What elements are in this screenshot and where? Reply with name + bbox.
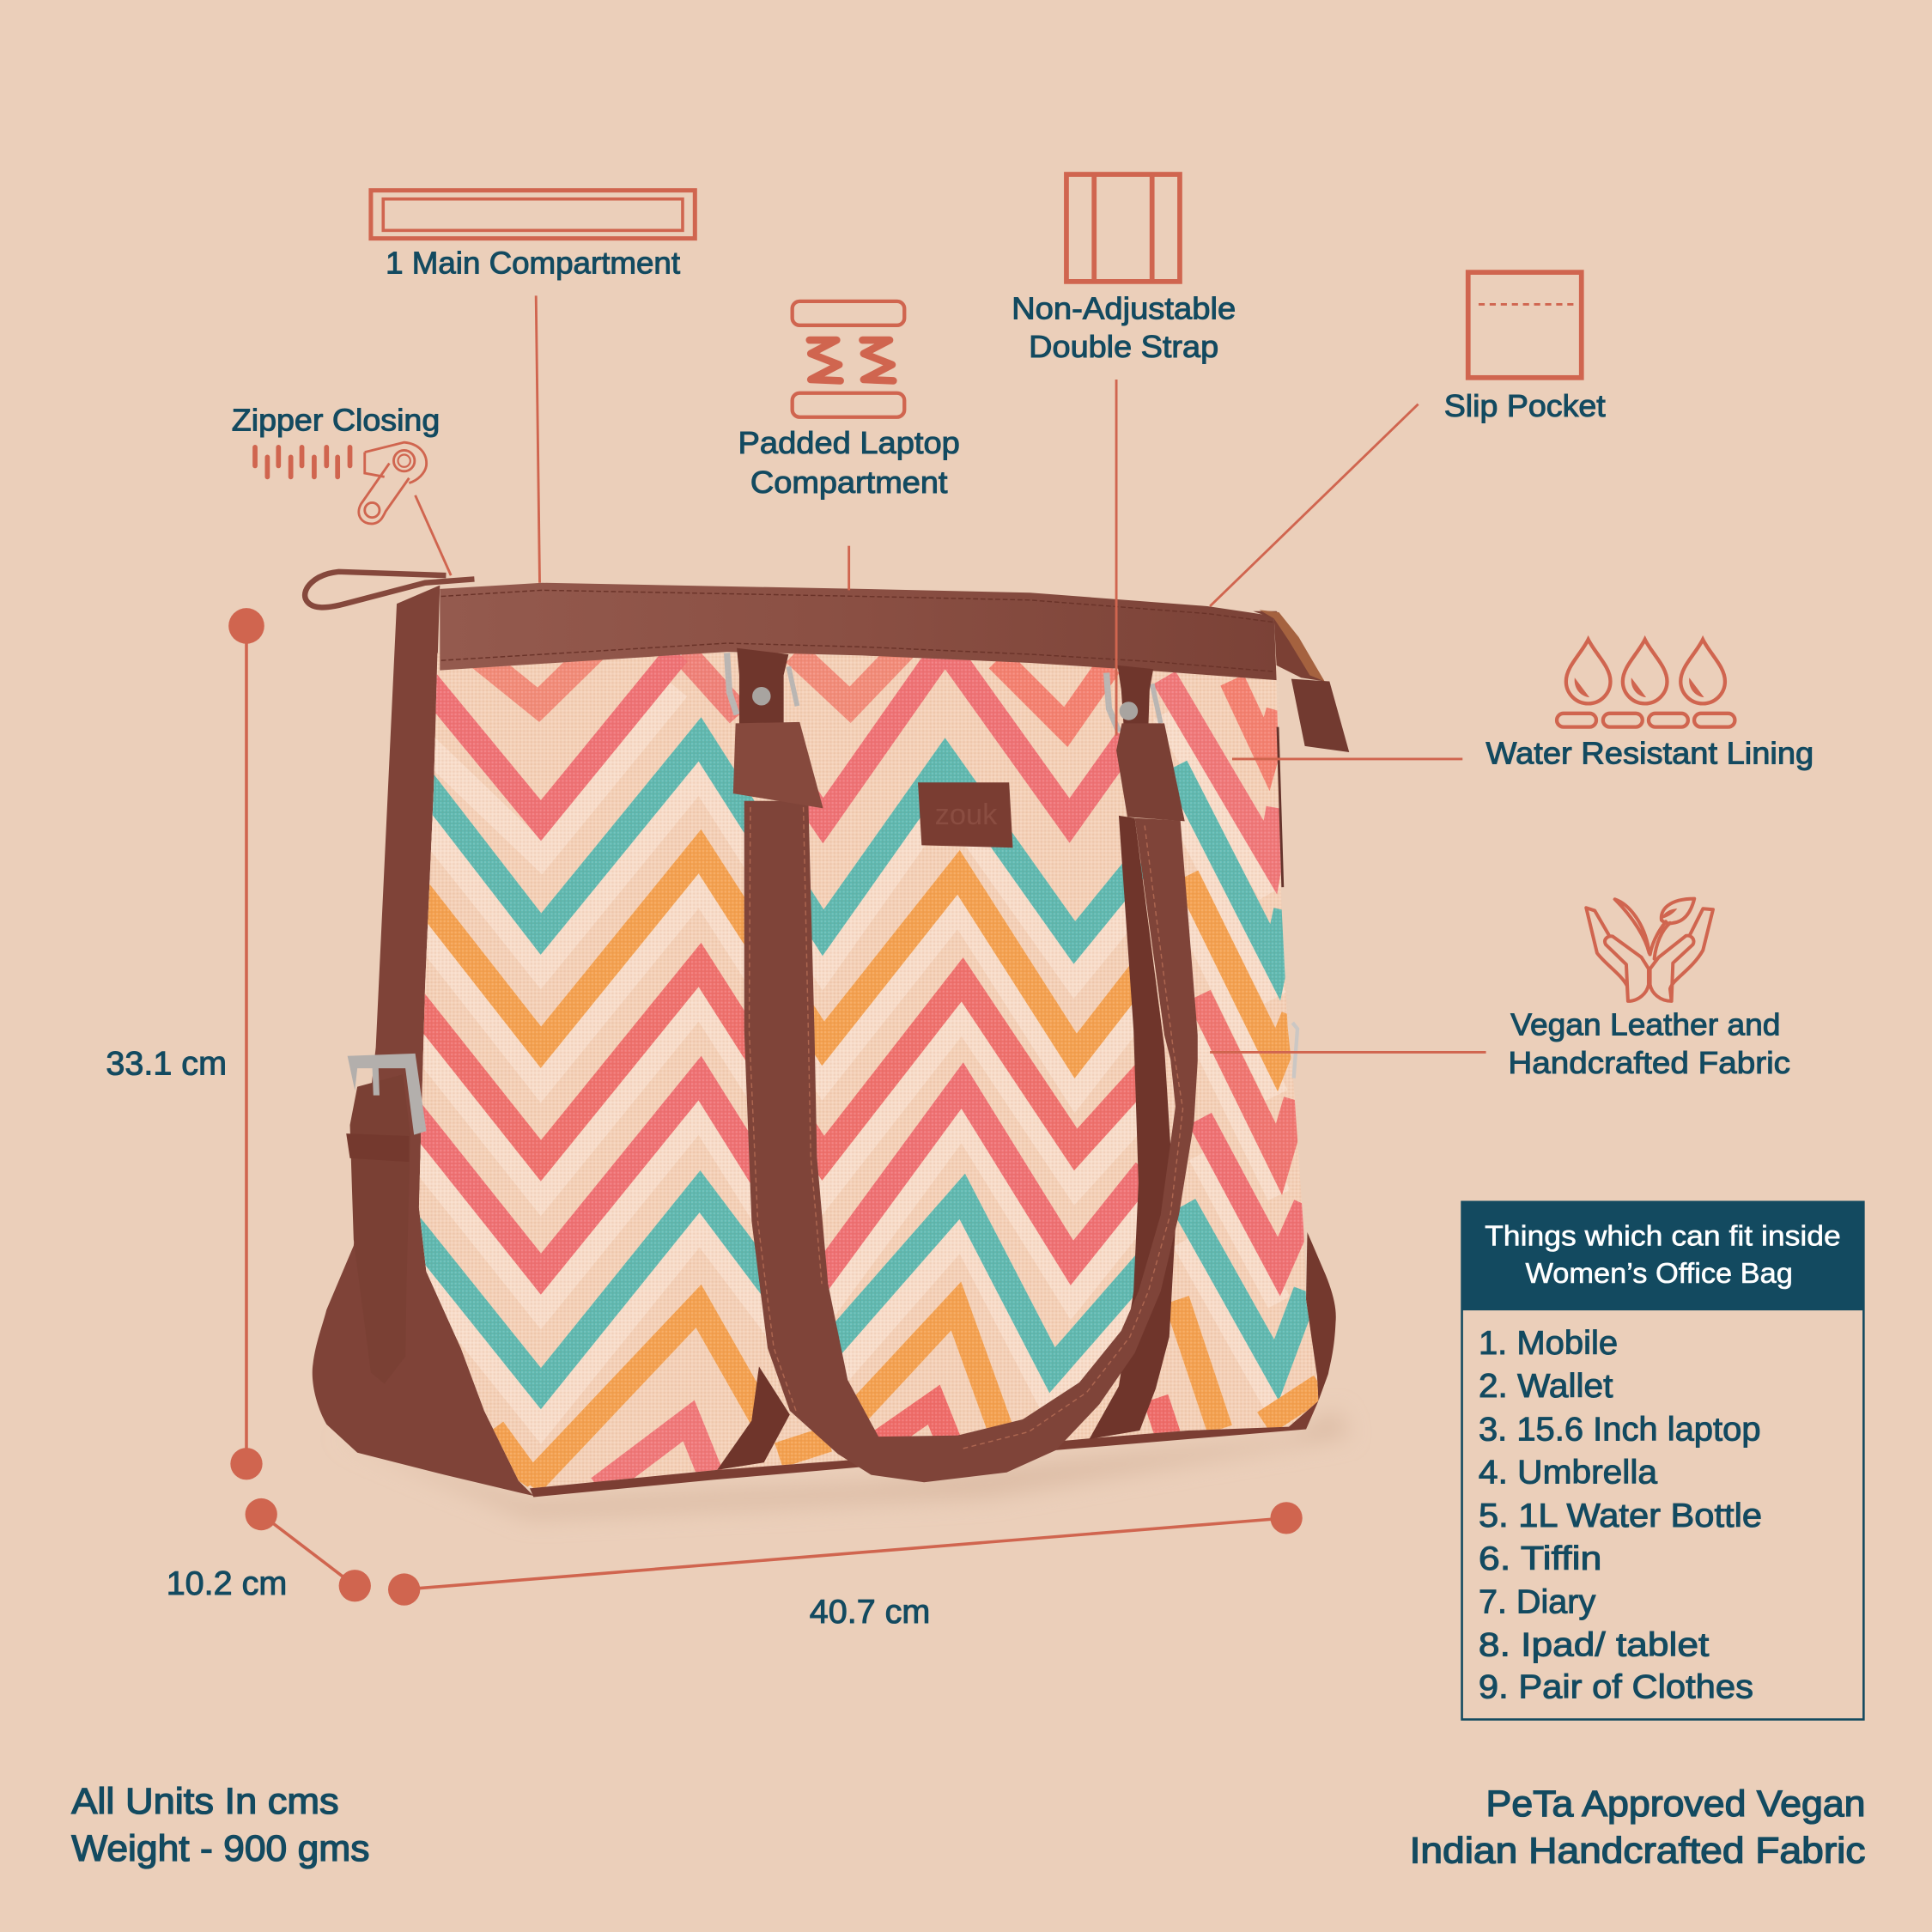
- footer note: units and weight: Weight - 900 gms: [71, 1828, 369, 1869]
- label: double strap: Double Strap: [1029, 330, 1218, 364]
- item list: 9. Pair of Clothes: [1479, 1668, 1753, 1705]
- label: water resistant: Water Resistant Lining: [1486, 737, 1814, 771]
- bag shadow: [332, 1411, 1349, 1518]
- right strap tab: [1116, 723, 1185, 821]
- leader line: water resistant: [1232, 758, 1462, 760]
- item list: 8. Ipad/ tablet: [1479, 1627, 1710, 1664]
- panel header: Women’s Office Bag: [1525, 1257, 1793, 1289]
- coloured chevron stripes: [407, 647, 1321, 1488]
- footer note: vegan fabric: PeTa Approved Vegan: [1486, 1783, 1866, 1825]
- side flap: [1253, 611, 1325, 682]
- label: zipper: Zipper Closing: [232, 404, 440, 438]
- brand patch: zouk: [935, 799, 998, 831]
- brand patch: [918, 782, 1013, 848]
- rear strap pieces: [717, 816, 1176, 1470]
- item list: 5. 1L Water Bottle: [1479, 1498, 1762, 1534]
- depth dimension: [246, 1498, 371, 1601]
- footer note: units and weight: All Units In cms: [71, 1781, 339, 1822]
- right gusset leather: [1306, 1232, 1336, 1401]
- footer note: vegan fabric: [1410, 1783, 1866, 1872]
- footer note: vegan fabric: Indian Handcrafted Fabric: [1410, 1831, 1866, 1872]
- leader line: zipper: [416, 495, 451, 575]
- label: padded laptop: [738, 426, 960, 500]
- label: vegan leather: [1508, 1007, 1790, 1080]
- icon: slip pocket: [1468, 272, 1582, 378]
- right metal clip: [1292, 1023, 1297, 1078]
- panel header: [1461, 1201, 1864, 1310]
- label: slip pocket: Slip Pocket: [1444, 389, 1606, 423]
- leader line: laptop compartment: [848, 546, 850, 590]
- icon: double strap: [1066, 173, 1180, 282]
- fabric panel with chevrons: [407, 641, 1343, 1504]
- item list: 6. Tiffin: [1479, 1540, 1601, 1577]
- side flap edge: [1260, 610, 1325, 682]
- front strap: [744, 801, 1198, 1482]
- leader line: main compartment: [536, 295, 540, 583]
- side strap: [350, 1074, 410, 1383]
- bottom leather edge: [530, 1401, 1318, 1497]
- item list: 1. Mobile: [1479, 1325, 1618, 1362]
- left strap tab: [733, 722, 823, 808]
- label: padded laptop: Compartment: [750, 465, 948, 500]
- left gusset leather: [313, 586, 533, 1496]
- label: main compartment: 1 Main Compartment: [386, 246, 680, 281]
- side metal buckle: [348, 1054, 426, 1135]
- item list: 7. Diary: [1479, 1583, 1596, 1620]
- panel: things which can fit inside: [1461, 1201, 1864, 1719]
- leader line: double strap: [1115, 380, 1117, 736]
- item list: 2. Wallet: [1479, 1368, 1613, 1405]
- bag photo illustration: [305, 572, 1349, 1518]
- width dimension: [388, 1502, 1303, 1606]
- label: double strap: [1012, 292, 1236, 364]
- footer note: units and weight: [71, 1781, 369, 1869]
- item list: [1479, 1325, 1762, 1705]
- top leather band: [440, 583, 1277, 680]
- strap D-rings: [727, 653, 1161, 732]
- item list: 4. Umbrella: [1479, 1455, 1657, 1492]
- side strap loop: [346, 1133, 409, 1162]
- side tab: [1291, 679, 1349, 752]
- icon: vegan hands: [1586, 899, 1713, 1001]
- icon: zipper: [255, 442, 427, 524]
- label: padded laptop: Padded Laptop: [738, 426, 960, 460]
- leader line: slip pocket: [1210, 404, 1419, 606]
- strap stitching: [749, 807, 1183, 1449]
- item list: 3. 15.6 Inch laptop: [1479, 1411, 1761, 1448]
- panel header: Things which can fit inside: [1485, 1220, 1841, 1252]
- right strap loop: [1117, 665, 1153, 727]
- cream bands: [407, 689, 1279, 1425]
- icon: padded laptop: [793, 301, 904, 417]
- height dimension: [228, 608, 264, 1479]
- icon: water drops: [1557, 640, 1735, 727]
- height label: 33.1 cm: [106, 1045, 227, 1082]
- leader line: vegan leather: [1210, 1051, 1486, 1053]
- rivets: [752, 687, 1138, 720]
- left strap loop: [737, 648, 788, 726]
- band stitching: [441, 590, 1274, 671]
- depth label: 10.2 cm: [167, 1565, 287, 1602]
- panel border: [1462, 1202, 1863, 1719]
- label: vegan leather: Handcrafted Fabric: [1508, 1046, 1790, 1080]
- label: double strap: Non-Adjustable: [1012, 292, 1236, 326]
- icon: main compartment: [371, 191, 695, 239]
- right edge piping: [1278, 727, 1283, 887]
- width label: 40.7 cm: [810, 1594, 930, 1631]
- zipper pull loop: [305, 572, 474, 607]
- label: vegan leather: Vegan Leather and: [1510, 1007, 1781, 1042]
